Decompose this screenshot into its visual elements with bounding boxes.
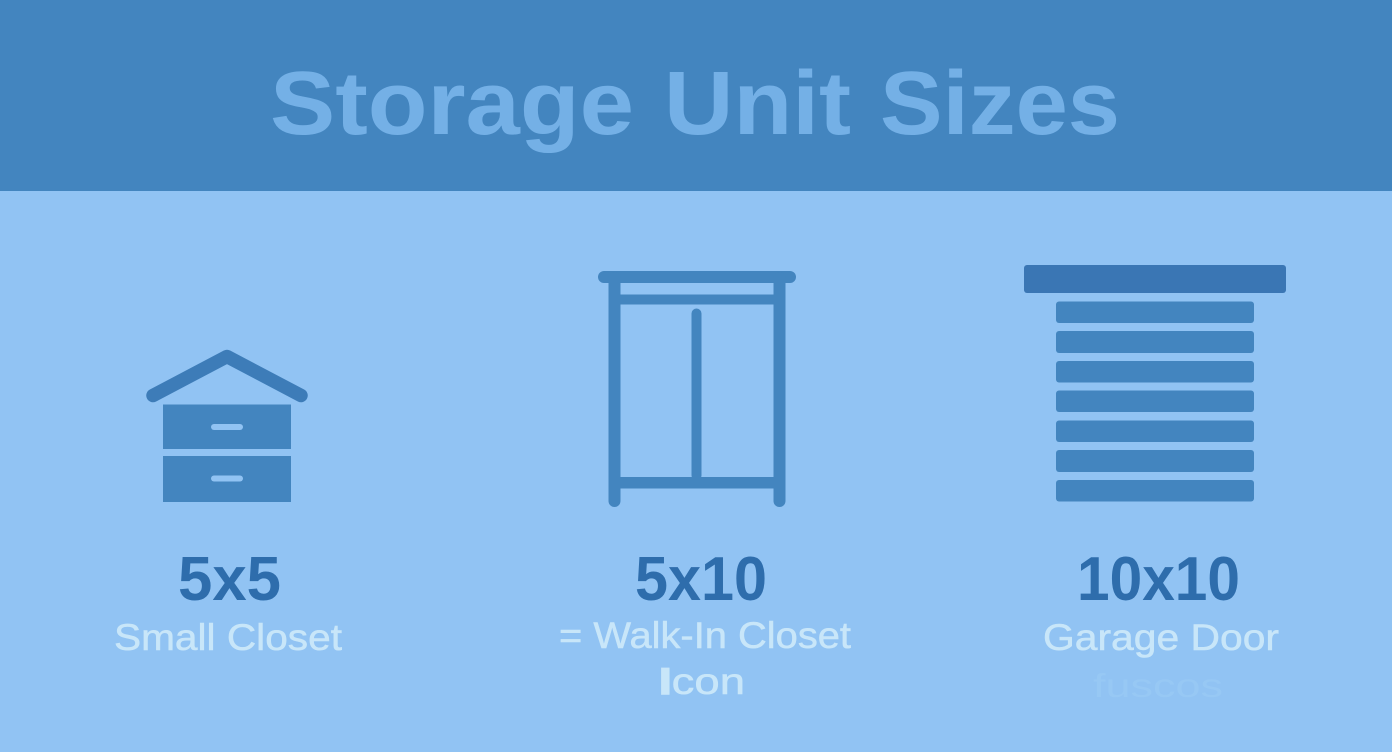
label: Small Closet: Small Closet <box>114 617 343 658</box>
icon: garage door <box>1024 265 1286 502</box>
label: Icon: Icon <box>659 661 745 702</box>
label: 5x5 size: 5x5 <box>178 545 281 614</box>
title <box>270 54 1120 154</box>
label: 10x10 size: 10x10 <box>1077 545 1240 614</box>
label: Walk-In Closet: = Walk-In Closet <box>559 615 852 656</box>
label: 5x10 size: 5x10 <box>635 545 767 614</box>
header band <box>0 0 1392 191</box>
icon: small closet with roof and drawers <box>153 356 301 502</box>
label: Garage Door: Garage Door <box>1043 617 1279 658</box>
title: Storage <box>270 54 634 154</box>
icon: walk-in closet wardrobe <box>598 271 796 507</box>
title: Sizes <box>880 54 1120 154</box>
title: Unit <box>664 54 851 154</box>
label: faint caption: fuscos <box>1093 667 1223 704</box>
